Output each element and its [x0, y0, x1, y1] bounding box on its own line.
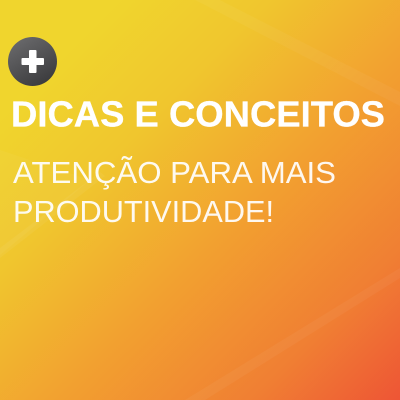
subtitle: PRODUTIVIDADE! — [13, 194, 274, 229]
title: DICAS E CONCEITOS — [11, 94, 385, 134]
subtitle: ATENÇÃO PARA MAIS — [13, 155, 336, 190]
icon: plus button — [8, 37, 57, 86]
subtitle — [13, 155, 336, 229]
